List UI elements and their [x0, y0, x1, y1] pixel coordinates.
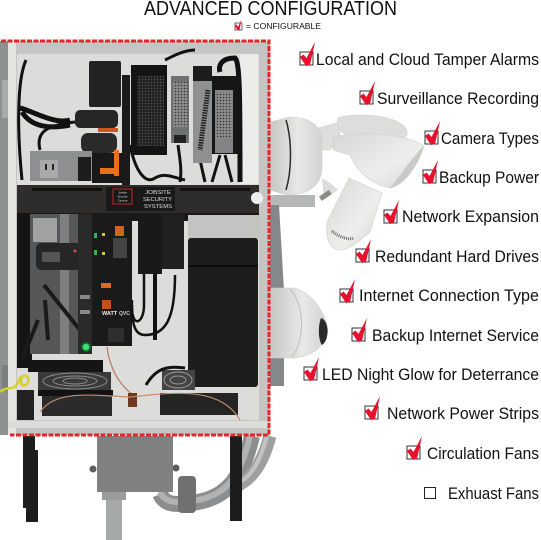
- lower dark area: [17, 213, 259, 221]
- feature list: [300, 42, 539, 503]
- green LED: [82, 343, 90, 351]
- right pipe: [240, 54, 258, 184]
- adapters: [75, 110, 118, 153]
- item: network power strips: [365, 396, 539, 423]
- item: local and cloud tamper alarms: [300, 42, 539, 69]
- logo plate: SYSTEMS: [144, 204, 172, 210]
- item: circulation fans: [407, 436, 539, 463]
- enclosure interior: [17, 54, 259, 420]
- enclosure: [0, 41, 270, 435]
- left terminal block: [17, 390, 34, 420]
- backup battery: [188, 215, 259, 387]
- center modules and cables: [132, 214, 184, 340]
- network switch: [131, 65, 167, 155]
- logo plate: Security: [117, 194, 128, 198]
- fan power wire: [40, 393, 240, 420]
- UPS module: WATT: [102, 311, 118, 317]
- UPS module: QVC: [119, 311, 130, 317]
- center vertical cable bundle: [92, 75, 130, 185]
- surge protector upper: [30, 151, 92, 181]
- UPS module: [92, 214, 132, 346]
- gray device 1: [171, 76, 189, 143]
- item: network expansion: Network Expansion: [402, 208, 539, 226]
- item: redundant hard drives: [356, 239, 539, 266]
- item: surveillance recording: [360, 81, 539, 108]
- item: backup internet service: [352, 318, 539, 345]
- logo plate: SECURITY: [143, 197, 172, 203]
- surge protector lower: [17, 213, 92, 368]
- floodlight camera: [270, 115, 424, 195]
- item: network power strips: Network Power Strips: [387, 405, 539, 423]
- item: camera types: [425, 121, 539, 148]
- item: backup power: [423, 160, 539, 187]
- top-left wires: [19, 50, 240, 182]
- enclosure frame: [0, 41, 270, 435]
- logo plate: [106, 187, 175, 211]
- hinges: [2, 80, 8, 391]
- logo plate: JOBSITE: [145, 190, 171, 196]
- logo plate: Jobsite: [118, 190, 127, 194]
- label bar: [17, 185, 263, 213]
- item: led night glow for deterrance: [304, 357, 539, 384]
- right fan: [146, 367, 238, 415]
- silver power supply: [193, 66, 212, 163]
- left fan: [28, 360, 113, 416]
- gray device 2: [212, 76, 240, 154]
- LED night glow strip: [1, 41, 269, 435]
- item: network expansion: [384, 200, 539, 226]
- wiring bundle: [107, 347, 137, 407]
- logo plate: Camera: [118, 198, 128, 202]
- ground wire: [0, 376, 28, 392]
- motion sensor camera: [319, 178, 382, 250]
- pole bracket: [270, 195, 315, 386]
- item: internet connection type: Internet Connection Type: [359, 287, 539, 305]
- mounting legs: [23, 436, 242, 522]
- item: internet connection type: [340, 279, 539, 305]
- junction box: [90, 436, 196, 540]
- power adapter top: [89, 61, 121, 107]
- conduit behind enclosure: [160, 436, 270, 504]
- legend: configurable: = CONFIGURABLE: [246, 21, 321, 31]
- dome camera: [270, 288, 328, 358]
